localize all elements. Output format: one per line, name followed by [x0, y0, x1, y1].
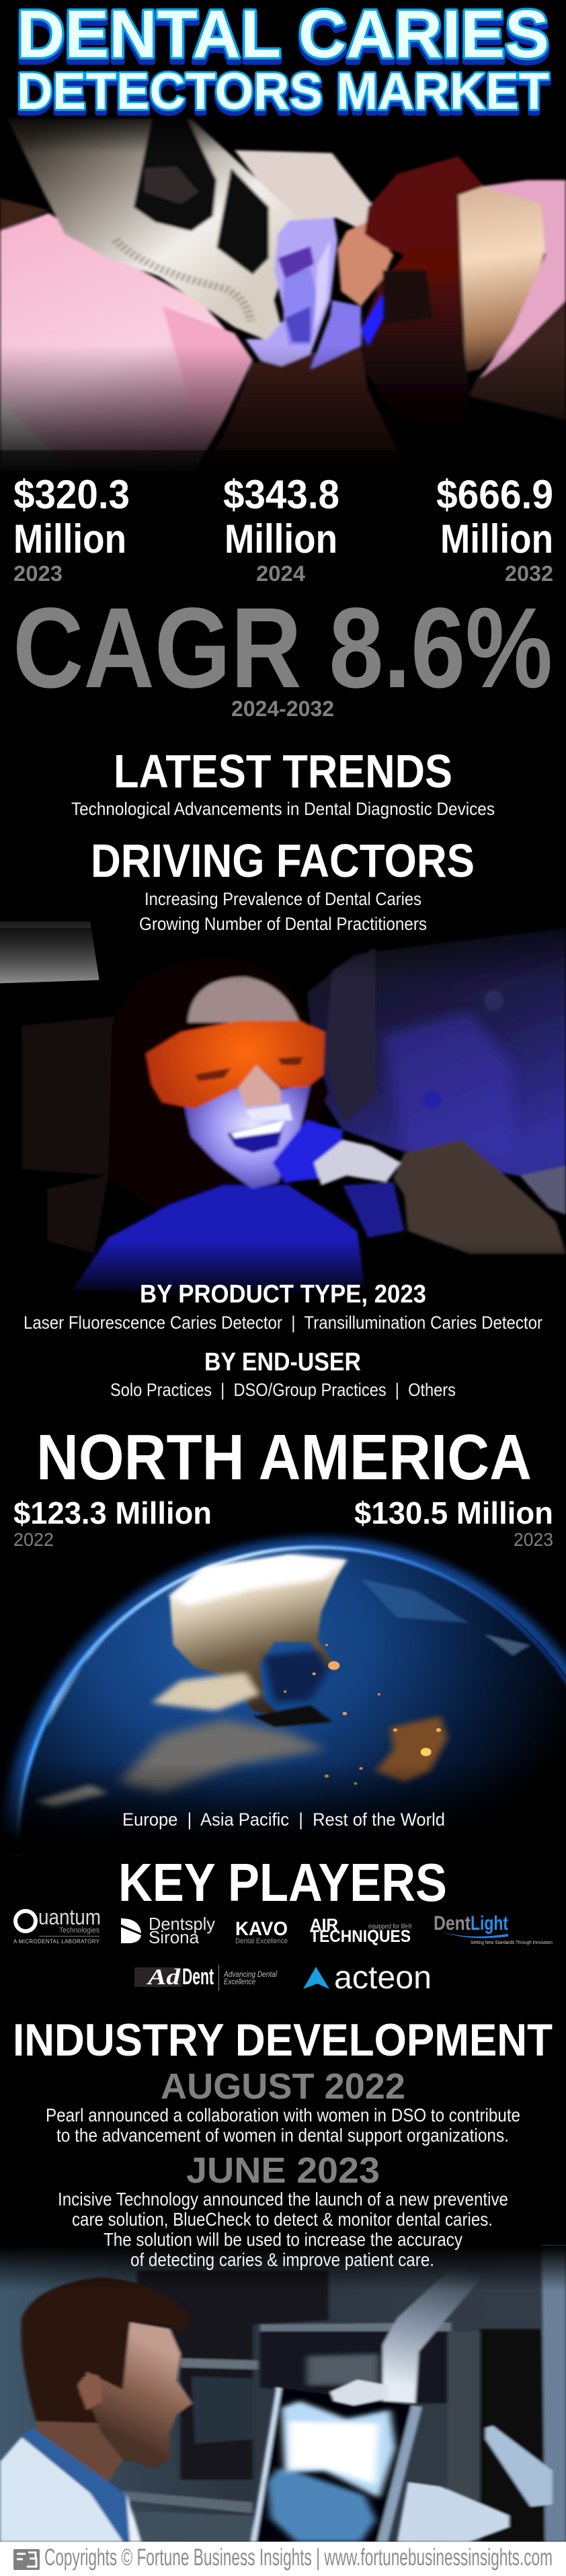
stat 2024: Million — [225, 516, 337, 561]
stat 2024: $343.8 — [223, 472, 339, 517]
logo: AdDent: Advancing Dental — [223, 1969, 277, 1979]
stat 2024: 2024 — [256, 561, 305, 586]
segment: by product type — [24, 1280, 542, 1333]
logo: Air Techniques — [310, 1916, 413, 1946]
market values by year — [13, 472, 553, 586]
logo: Dentsply Sirona: Dentsply — [149, 1914, 215, 1934]
title: DETECTORS MARKET — [17, 67, 549, 124]
stat 2023: 2023 — [13, 561, 63, 586]
logo: KaVo: Dental Excellence — [235, 1937, 288, 1945]
logo: AdDent: Ad — [147, 1965, 181, 1990]
driving factors: Growing Number of Dental Practitioners — [139, 914, 427, 934]
development: June 2023: of detecting caries & improve patient care. — [130, 2249, 434, 2270]
driving factors — [91, 834, 475, 934]
stat 2032 — [436, 472, 553, 586]
segment: by end-user: BY END-USER — [204, 1348, 361, 1376]
logo: DentLight: Setting New Standards Through Innovation — [471, 1941, 553, 1945]
North America value 2022 — [13, 1495, 212, 1550]
logo: AdDent: Excellence — [224, 1977, 255, 1986]
footer — [0, 2542, 566, 2576]
development: June 2023: JUNE 2023 — [186, 2150, 380, 2191]
development: June 2023: Incisive Technology announced the launch of a new preventive — [58, 2189, 508, 2210]
logo: AdDent: Dent — [182, 1964, 214, 1990]
icon: Fortune Business Insights logo — [13, 2549, 40, 2570]
North America value 2022: $123.3 Million — [13, 1495, 212, 1530]
stat 2032: 2032 — [505, 561, 553, 586]
logo: Quantum Technologies — [13, 1905, 101, 1945]
logo: Acteon: acteon — [334, 1960, 432, 1996]
development: August 2022: AUGUST 2022 — [161, 2066, 405, 2107]
logo: Quantum Technologies: A MICRODENTAL LABORATORY — [13, 1939, 100, 1945]
North America value 2023: $130.5 Million — [354, 1495, 553, 1530]
latest trends: Technological Advancements in Dental Diagnostic Devices — [71, 799, 495, 819]
company logos — [13, 1905, 553, 1996]
logo: Quantum Technologies: Technologies — [59, 1926, 99, 1935]
logo: DentLight: Light — [471, 1912, 508, 1935]
stat 2032: $666.9 — [436, 472, 553, 517]
logo: KaVo: KAVO — [235, 1918, 288, 1940]
stat 2023: $320.3 — [13, 472, 130, 517]
segment: by end-user — [110, 1348, 456, 1400]
driving factors: Increasing Prevalence of Dental Caries — [145, 889, 421, 909]
North America value 2023: 2023 — [514, 1529, 553, 1550]
stat 2032: Million — [440, 516, 553, 561]
logo: Air Techniques: AIR — [310, 1916, 338, 1935]
segment: by product type: BY PRODUCT TYPE, 2023 — [140, 1280, 426, 1309]
latest trends — [71, 745, 495, 819]
development: June 2023: The solution will be used to increase the accuracy — [104, 2229, 462, 2250]
logo: Quantum Technologies: uantum — [38, 1905, 101, 1929]
logo: DentLight — [434, 1912, 553, 1945]
development: June 2023: care solution, BlueCheck to detect & monitor dental caries. — [72, 2209, 493, 2230]
key players heading: KEY PLAYERS — [118, 1852, 447, 1912]
other regions: Europe | Asia Pacific | Rest of the World — [122, 1809, 445, 1830]
logo: AdDent — [134, 1964, 277, 1991]
stat 2024 — [223, 472, 339, 586]
logo: DentLight: Dent — [434, 1912, 471, 1935]
regional headline: North America — [13, 1421, 553, 1550]
North America value 2023 — [354, 1495, 553, 1550]
logo: Dentsply Sirona: Sirona — [149, 1927, 200, 1947]
CAGR headline: 2024-2032 — [231, 697, 334, 721]
stat 2023: Million — [13, 516, 126, 561]
photo: earth at night — [1, 1530, 566, 1856]
photo: dentist reviewing x-ray — [0, 2246, 566, 2542]
logo: Air Techniques: equipped for life® — [368, 1923, 413, 1930]
photo: patient with orange goggles and blue light — [0, 921, 566, 1300]
driving factors: DRIVING FACTORS — [91, 834, 475, 887]
logo: Dentsply Sirona — [121, 1914, 215, 1947]
title — [17, 0, 549, 124]
title: DENTAL CARIES — [17, 1, 549, 77]
development: August 2022 — [46, 2066, 520, 2146]
stat 2023 — [13, 472, 130, 586]
latest trends: LATEST TRENDS — [114, 745, 452, 797]
segment: by end-user: Solo Practices | DSO/Group Practices | Others — [110, 1380, 456, 1400]
development: August 2022: to the advancement of women in dental support organizations. — [56, 2125, 509, 2146]
photo: dental curing light on patient — [0, 117, 566, 480]
logo: Air Techniques: TECHNIQUES — [310, 1927, 411, 1946]
title: DETECTORS MARKET — [17, 63, 549, 120]
development: June 2023 — [58, 2150, 508, 2270]
North America value 2022: 2022 — [13, 1529, 54, 1550]
